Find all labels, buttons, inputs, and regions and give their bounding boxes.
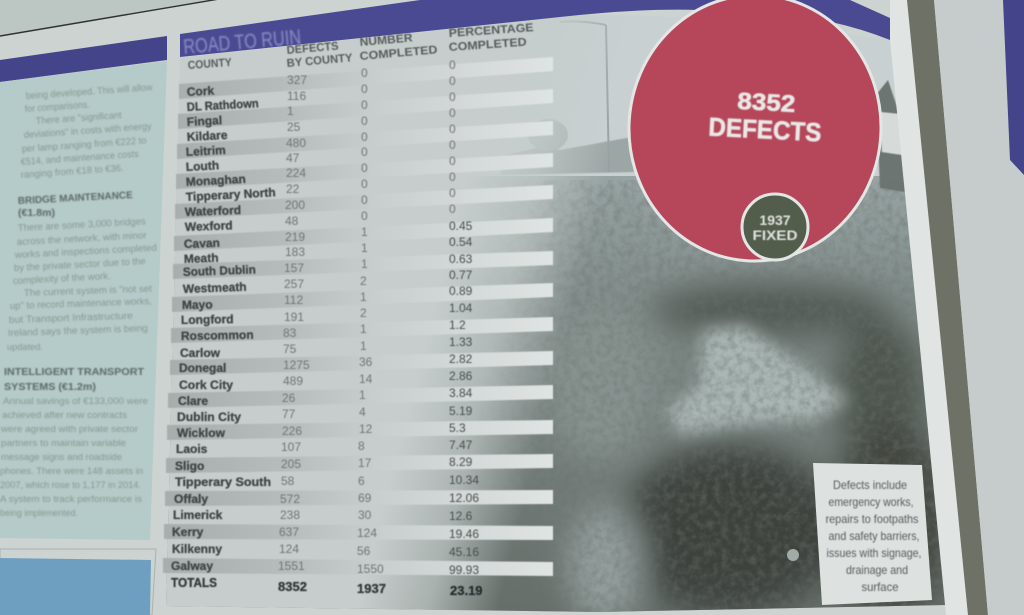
percentage completed column: 10.34 [449,473,479,487]
caption text: issues with signage, [826,546,922,560]
caption text: and safety barriers, [828,529,920,543]
article text: A system to track performance is [0,494,142,505]
number completed column: 0 [361,209,368,223]
article text: were agreed with private sector [0,424,138,435]
column headers: COMPLETED [448,37,527,54]
county column: Clare [178,394,208,408]
percentage completed column: 2.82 [449,352,473,366]
percentage completed column: 12.06 [449,491,479,505]
defects by county column: 480 [286,136,306,150]
percentage completed column: 1.2 [449,318,466,332]
county column: Westmeath [183,280,247,296]
defects by county column: 1275 [283,358,310,372]
defects by county column: 124 [279,542,299,556]
number completed column: 0 [361,161,368,175]
title bar [180,0,890,57]
percentage completed column: 12.6 [449,509,473,523]
row stripes [163,57,553,576]
percentage completed column: 0.63 [449,252,473,266]
defects by county column: 183 [285,245,305,259]
article text: by the private sector due to the [14,256,146,274]
county column: Wicklow [177,426,226,440]
percentage completed column: 5.19 [449,404,473,418]
percentage completed column: 1.04 [449,301,473,315]
column headers [187,22,534,72]
county column: Fingal [186,113,222,129]
column headers: COUNTY [187,57,232,72]
sky [160,0,960,180]
caption text: Defects include [833,478,907,492]
number completed column: 1 [361,257,368,271]
article text: being implemented. [0,508,78,519]
percentage completed column: 0 [449,106,456,120]
caption text: emergency works, [828,495,914,509]
number completed column: 0 [361,114,368,128]
article text: There are "significant [35,110,122,127]
percentage completed column: 0 [449,90,456,104]
number completed column: 0 [361,130,368,144]
county column: Tipperary South [175,475,271,489]
county column: Roscommon [181,328,254,343]
label: 1937 fixed [752,212,798,243]
article subheadings: INTELLIGENT TRANSPORT [4,367,144,378]
caption text: drainage and [846,563,908,577]
county column: Laois [176,442,208,456]
caption text [826,478,922,594]
percentage completed column: 99.93 [449,563,479,577]
number completed column: 0 [361,193,368,207]
number completed column: 6 [358,474,365,488]
article text: The current system is "not set [24,284,152,299]
county column: Cavan [184,236,220,251]
article text: across the network, with minor [17,230,147,248]
label: 1937 fixed: FIXED [752,227,798,243]
number completed column: 0 [361,82,368,96]
article text: up" to record maintenance works, [10,296,152,312]
small green circle: fixed count [742,194,808,260]
county column: Monaghan [185,172,246,189]
percentage completed column: 8.29 [449,455,473,469]
percentage completed column: 0 [449,154,456,168]
percentage completed column: 0 [449,58,456,72]
defects by county column: 22 [286,182,300,196]
article subheadings: (€1.8m) [18,208,55,219]
defects by county column: 637 [279,525,299,539]
county column: Tipperary North [185,185,276,204]
article subheadings [4,190,144,393]
county column: Galway [171,559,213,573]
number completed column: 8 [358,439,365,453]
percentage completed column: 0 [449,138,456,152]
defects by county column: 226 [282,424,302,438]
percentage completed column: 5.3 [449,421,466,435]
defects by county column: 48 [285,214,299,228]
column headers: BY COUNTY [286,52,353,70]
defects by county column: 107 [281,440,301,454]
gravel texture [532,180,940,612]
defects by county column: 1551 [278,559,305,573]
county column: DL Rathdown [186,96,259,114]
county column: Kildare [186,128,228,144]
defects by county column: 219 [285,230,305,244]
caption text: surface [862,580,899,594]
defects by county column: 157 [284,261,304,275]
blue picture [0,558,151,615]
article text: Ireland says the system is being [8,323,148,339]
defects by county column: 26 [282,391,296,405]
caption text: repairs to footpaths [826,512,918,526]
number completed column: 56 [357,544,371,558]
number completed column: 36 [359,355,373,369]
percentage completed column: 3.84 [449,386,473,400]
percentage completed column: 0 [449,122,456,136]
article text: works and inspections completed [14,243,157,261]
defects by county column: 116 [287,89,306,103]
percentage completed column: 7.47 [449,438,473,452]
panel: county table [163,22,553,598]
defects by county column: 224 [286,166,306,180]
defects by county column: 25 [287,120,301,134]
number completed column: 4 [359,405,366,419]
number completed column: 1 [359,388,366,402]
defects by county column: 200 [285,198,305,212]
totals row: TOTALS [171,575,217,590]
county column: Longford [181,312,234,327]
county column: Leitrim [185,143,226,159]
county column: Kilkenny [172,542,222,556]
article text: partners to maintain variable [1,438,126,449]
number completed column [357,66,384,576]
totals row: 1937 [357,581,386,596]
article text: updated. [7,342,43,353]
article text: per lamp ranging from €222 to [21,135,147,155]
number completed column: 0 [361,177,368,191]
big red circle: total defects [622,0,888,267]
percentage completed column: 0 [449,170,456,184]
number completed column: 17 [358,456,372,470]
county column: Wexford [185,218,233,234]
county column: Limerick [173,508,223,522]
defects by county column: 112 [284,293,303,307]
article text: deviations" in costs with energy [23,121,152,141]
article subheadings: SYSTEMS (€1.2m) [4,382,96,393]
article text: being developed. This will allow [25,82,153,102]
county column: Cork City [179,378,233,392]
county column: Mayo [182,297,213,312]
number completed column: 0 [361,66,368,80]
number completed column: 1 [361,241,368,255]
percentage completed column: 19.46 [449,527,479,541]
county column: Meath [184,251,219,266]
article text: but Transport Infrastructure [9,311,133,326]
label: 8352 defects: DEFECTS [708,112,822,147]
article text: achieved after new contracts [2,410,127,421]
defects by county column: 191 [284,310,304,324]
column headers: COMPLETED [359,44,438,63]
caption box [813,463,932,605]
percentage completed column: 0.45 [449,219,473,233]
column headers: PERCENTAGE [448,22,534,40]
county column: Carlow [180,346,221,360]
defects by county column: 205 [281,457,301,471]
defects by county column: 47 [286,151,300,165]
number completed column: 1 [360,290,367,304]
totals row: 8352 [278,579,307,594]
percentage completed column: 2.86 [449,369,473,383]
column headers: DEFECTS [286,40,339,57]
label: 8352 defects: 8352 [737,88,796,118]
defects by county column: 572 [280,492,300,506]
number completed column: 0 [361,98,368,112]
number completed column: 1 [360,339,367,353]
totals row [171,575,483,598]
percentage completed column: 0.77 [449,268,473,282]
defects by county column: 83 [283,326,297,340]
distant buildings and tree [500,80,905,192]
number completed column: 69 [358,491,372,505]
percentage completed column: 0 [449,186,456,200]
article text [0,82,157,519]
county column: South Dublin [183,262,256,279]
label: 1937 fixed: 1937 [759,212,791,228]
defects by county column: 489 [283,374,303,388]
pothole patches [545,282,950,615]
article subheadings: BRIDGE MAINTENANCE [18,190,133,207]
panel: road photograph [160,0,960,615]
percentage completed column: 45.16 [449,545,479,559]
county column: Sligo [175,459,204,473]
article text: phones. There were 148 assets in [0,466,143,477]
article text: complexity of the work. [13,271,111,287]
left purple header bar [0,36,167,82]
number completed column: 2 [360,306,367,320]
road surface [160,176,960,615]
defects by county column: 257 [284,277,304,291]
number completed column: 14 [359,372,373,386]
defects by county column: 327 [287,73,307,87]
defects by county column: 238 [280,508,300,522]
number completed column: 30 [358,508,372,522]
opposite page purple edge [1003,0,1024,175]
article text: for comparisons. [24,99,90,115]
defects by county column: 77 [282,407,296,421]
defects by county column: 1 [287,104,294,118]
percentage completed column: 0.89 [449,284,473,298]
county column: Waterford [185,203,241,219]
county column: Dublin City [177,410,241,424]
number completed column: 1 [361,225,368,239]
table title: ROAD TO RUIN [182,26,302,59]
article text: Annual savings of €133,000 were [3,396,148,407]
number completed column: 2 [360,274,367,288]
percentage completed column: 1.33 [449,335,473,349]
article text: ranging from €18 to €36. [20,163,124,181]
article text: 2007, which rose to 1,177 in 2014. [0,480,141,491]
stone [787,549,799,561]
number completed column: 0 [361,145,368,159]
defects by county column: 75 [283,342,297,356]
number completed column: 12 [359,422,373,436]
lamp post [560,21,609,172]
county column: Kerry [172,525,204,539]
percentage completed column [449,58,479,577]
label: 8352 defects [708,87,823,147]
county column: Offaly [174,492,208,506]
defects by county column: 58 [281,474,295,488]
page margin and spine [890,0,1024,615]
column headers: NUMBER [359,32,414,49]
article text: There are some 3,000 bridges [18,216,146,234]
number completed column: 1 [360,322,367,336]
county column: Donegal [179,361,226,375]
number completed column: 124 [357,526,377,540]
county column: Louth [185,158,219,174]
county column: Cork [186,84,215,99]
percentage completed column: 0 [449,74,456,88]
percentage completed column: 0 [449,202,456,216]
article text: €514, and maintenance costs [20,149,139,168]
number completed column: 1550 [357,562,384,576]
defects by county column [278,73,310,573]
article text: message signs and roadside [1,452,122,463]
totals row: 23.19 [450,583,483,598]
percentage completed column: 0.54 [449,235,473,249]
table fade over photo [166,20,608,610]
county column [171,84,276,573]
